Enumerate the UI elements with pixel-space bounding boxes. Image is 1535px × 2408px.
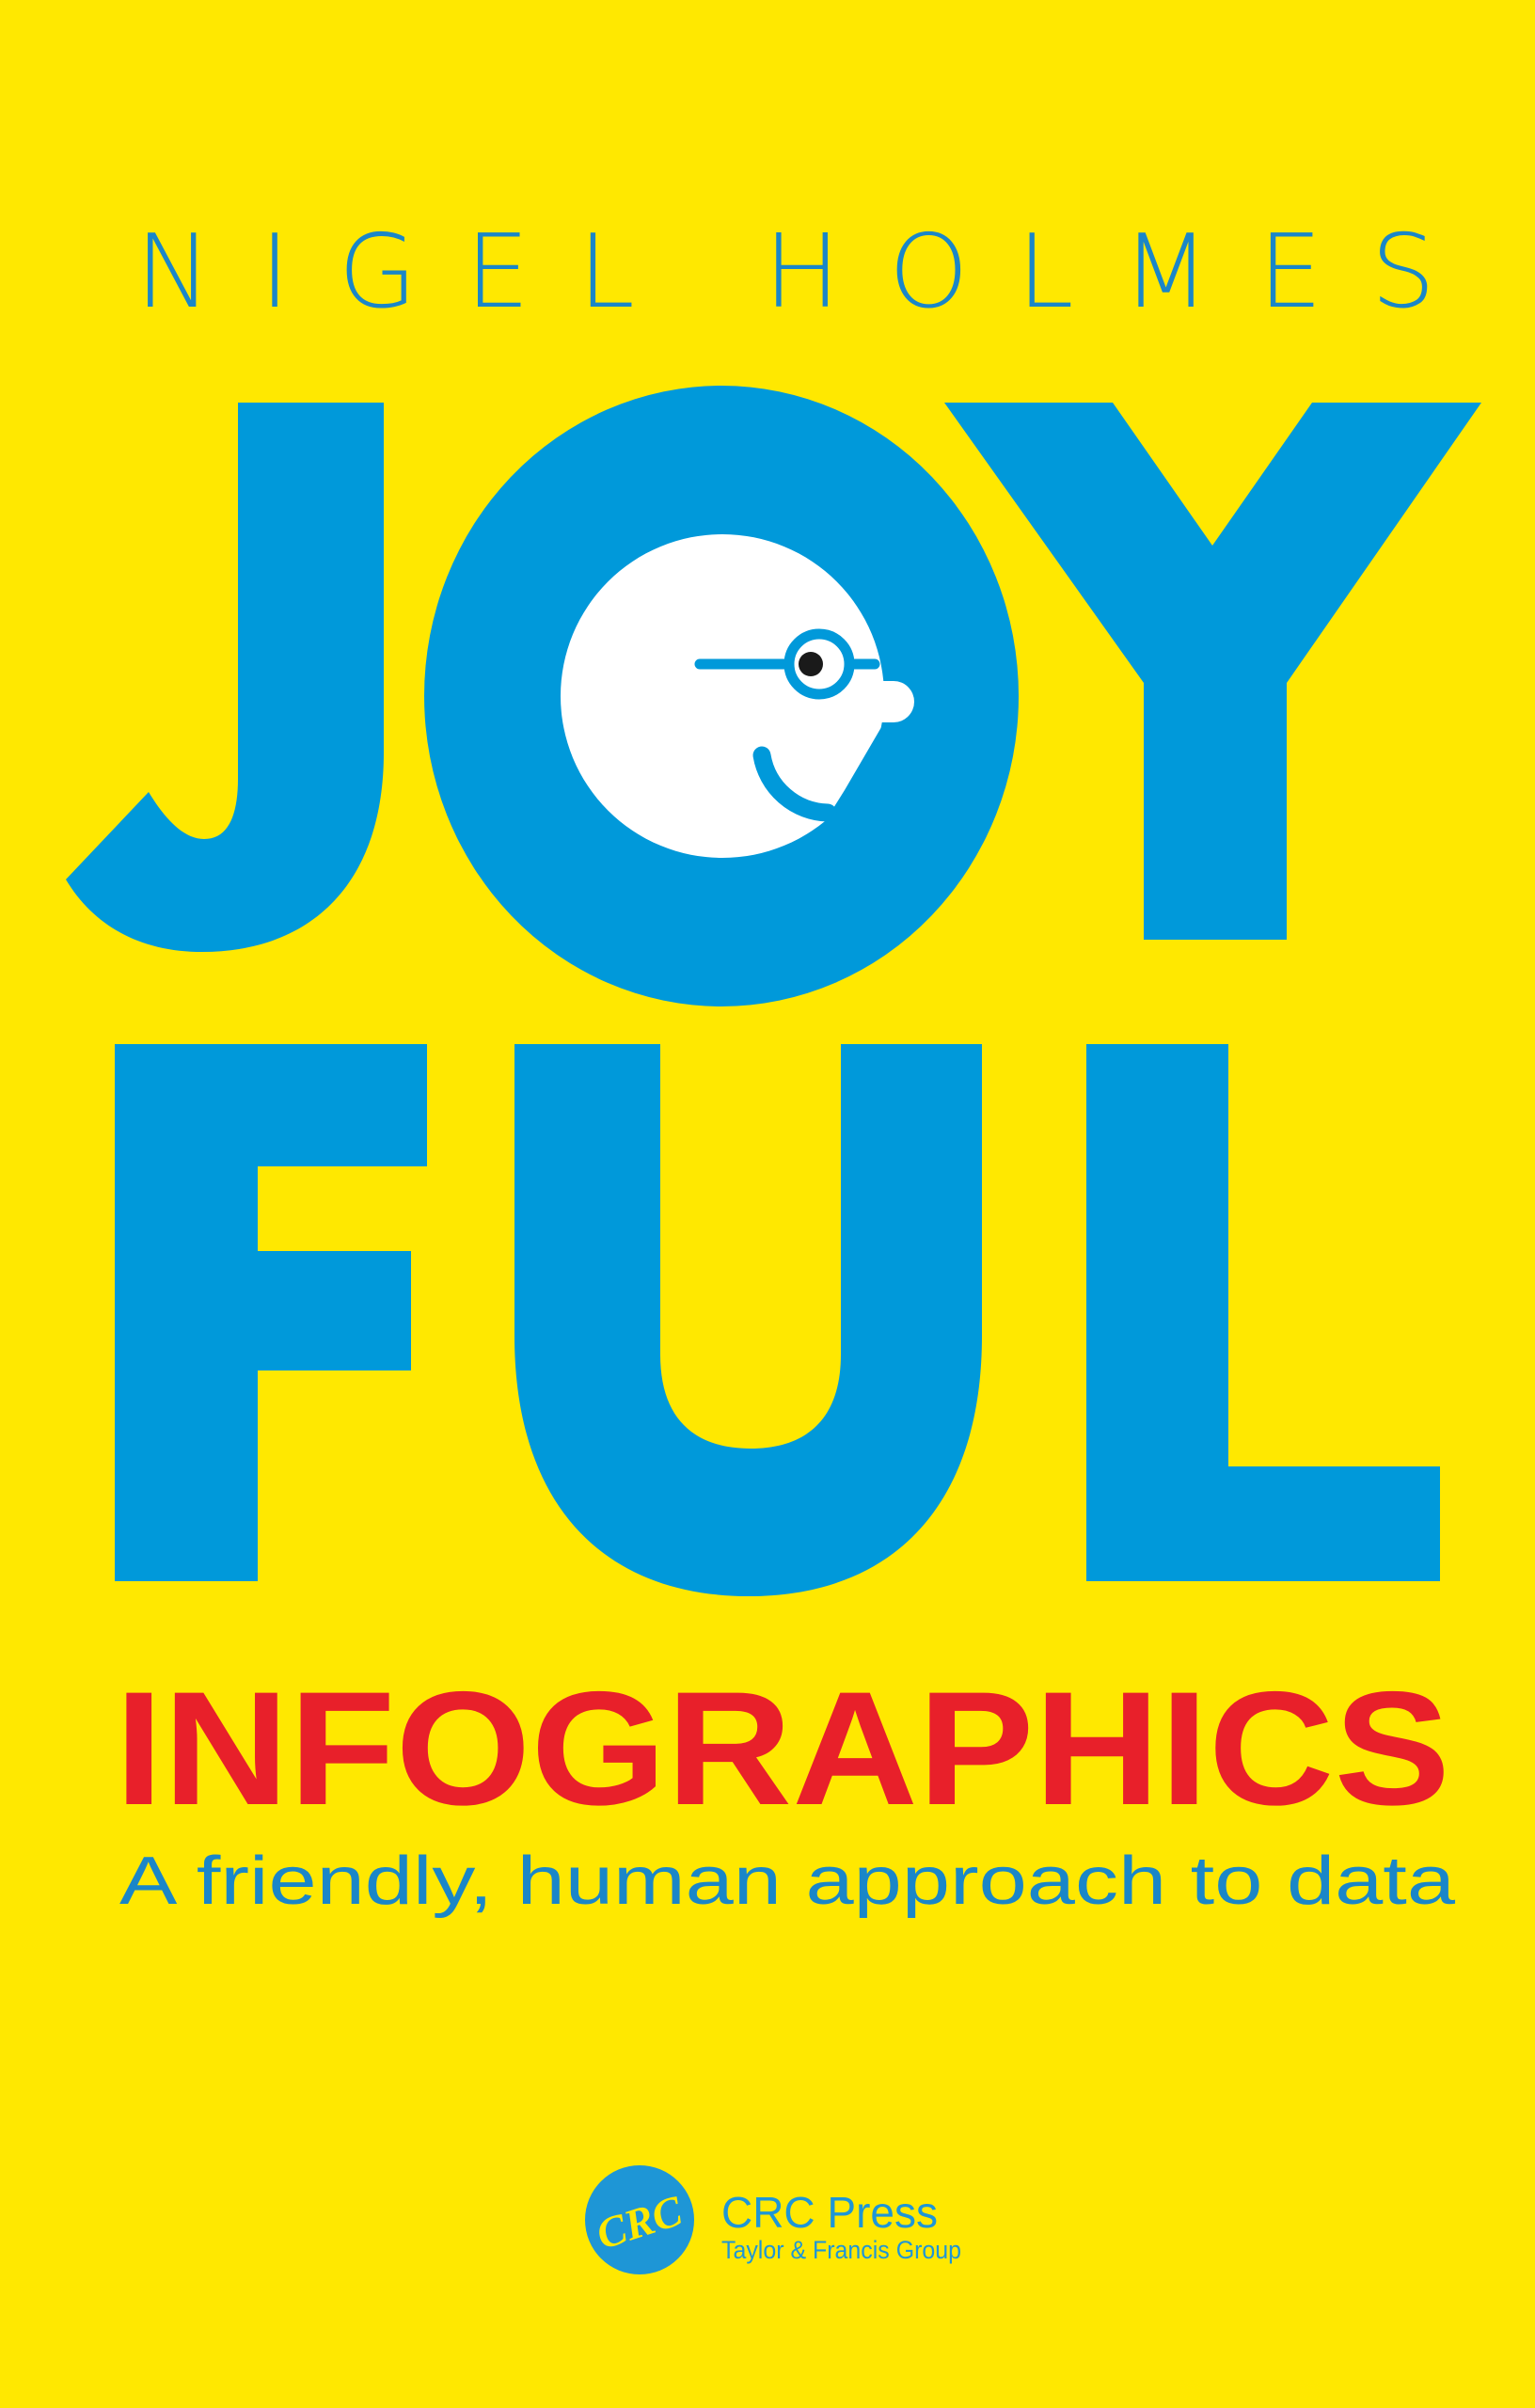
letter U [514,1044,982,1596]
letter O with face [424,386,1019,1006]
book cover [66,231,1481,2274]
publisher logo: Taylor & Francis Group [721,2236,961,2264]
icon: CRC circle [585,2165,694,2274]
publisher logo: CRC [591,2186,688,2258]
smile [762,755,828,813]
letter F [115,1044,427,1581]
author name: NIGEL HOLMES [135,214,1435,331]
letter Y [944,403,1481,940]
face [561,534,914,858]
eye [799,652,823,676]
letter L [1086,1044,1440,1581]
letter J [66,403,384,952]
publisher logo [585,2165,961,2274]
nose [847,681,914,722]
glasses [700,658,875,670]
subtitle: A friendly, human approach to data [119,1844,1456,1919]
publisher name: CRC Press [721,2188,938,2237]
title: INFOGRAPHICS: INFOGRAPHICS [115,1658,1450,1839]
